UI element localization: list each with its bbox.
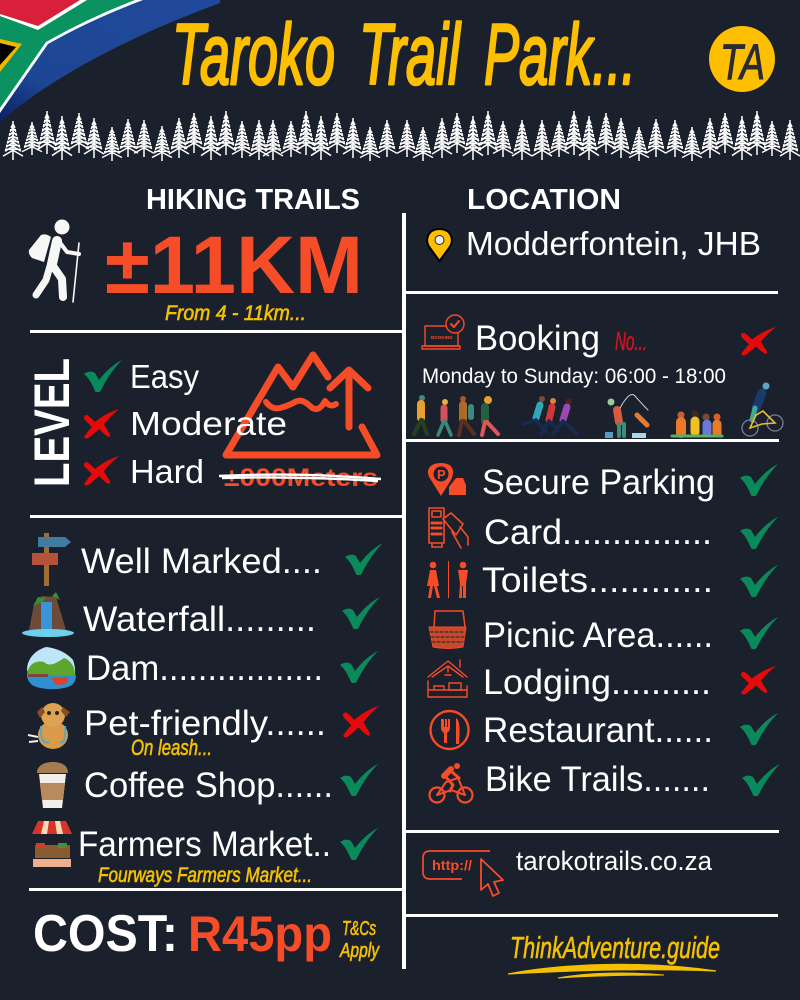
- text: toilets: Toilets............: [482, 561, 713, 600]
- illustration: picnic group: [672, 410, 722, 436]
- opening hours: Monday to Sunday: 06:00 - 18:00: [422, 365, 726, 388]
- check: toilets: [740, 565, 778, 597]
- cost label: COST:: [33, 905, 178, 963]
- check: farmers market: [340, 828, 378, 860]
- text: booking: Booking: [475, 319, 600, 358]
- panel: location: [427, 225, 761, 262]
- panel: amenities: [427, 463, 780, 802]
- cross: booking: [741, 327, 776, 356]
- text: bike trails: Bike Trails.......: [485, 760, 710, 799]
- icon: toilets: [427, 561, 468, 598]
- icon: restaurant: [430, 711, 468, 749]
- moderate row: Moderate: [130, 405, 287, 442]
- elevation struck through: ±000Meters: [224, 464, 378, 492]
- dividers: [29, 213, 779, 969]
- illustration: hikers: [414, 395, 498, 435]
- note: terms: Apply: [339, 940, 380, 962]
- note: fourways farmers market: Fourways Farmers Market...: [98, 864, 312, 887]
- panel: distance: [29, 220, 363, 325]
- icon: lodging: [428, 660, 467, 697]
- text: waterfall: Waterfall.........: [83, 600, 316, 639]
- title: [172, 7, 636, 103]
- check: parking: [740, 464, 778, 496]
- text: card: Card...............: [484, 513, 712, 552]
- text: dam: Dam.................: [86, 649, 323, 688]
- icon: TA logo badge: TA: [720, 34, 765, 90]
- panel: website: [423, 846, 713, 896]
- check: bike trails: [742, 764, 780, 796]
- location name: Modderfontein, JHB: [466, 225, 761, 262]
- icon: http cursor: [423, 851, 503, 896]
- panel: booking and hours: [414, 315, 783, 438]
- check: coffee shop: [340, 764, 378, 796]
- panel: level: [24, 355, 381, 492]
- illustration: cyclist: [742, 382, 783, 436]
- hard row: [84, 453, 204, 490]
- cross: lodging: [741, 666, 776, 695]
- cost value: R45pp: [188, 906, 332, 962]
- text: secure parking: Secure Parking: [482, 463, 715, 502]
- icon: booking laptop: BOOKING: [431, 335, 453, 340]
- icon: parking pin: [428, 463, 466, 496]
- title: Park...: [484, 7, 636, 103]
- tree line: [3, 111, 800, 161]
- icon: parking pin: P: [437, 467, 446, 482]
- icon: signpost: [32, 533, 71, 586]
- panel: cost: [33, 905, 380, 963]
- check: waterfall: [342, 597, 380, 629]
- title: Trail: [359, 7, 462, 103]
- illustration: angler: [605, 394, 648, 438]
- distance figure: ±11KM: [105, 220, 363, 311]
- text: restaurant: Restaurant......: [483, 711, 713, 750]
- check: well marked: [345, 543, 383, 575]
- note: no: No...: [615, 326, 647, 356]
- text: picnic area: Picnic Area......: [483, 616, 713, 655]
- check: picnic: [740, 617, 778, 649]
- cross: pet-friendly: [343, 706, 379, 737]
- easy row: Easy: [130, 358, 199, 395]
- text: well marked: Well Marked....: [81, 542, 322, 581]
- heading: level: LEVEL: [24, 358, 80, 487]
- icon: map pin: [427, 229, 452, 261]
- brand logo: ThinkAdventure.guide: [508, 930, 720, 978]
- icon: waterfall: [22, 592, 74, 637]
- moderate row: [84, 405, 287, 442]
- heading: location: LOCATION: [467, 184, 621, 216]
- note: terms: [339, 918, 380, 962]
- icon: card machine: [429, 508, 468, 548]
- icon: dog on leash: [28, 703, 70, 749]
- easy row: [84, 358, 199, 395]
- illustration: runners: [524, 396, 577, 434]
- icon: booking laptop: [422, 315, 464, 349]
- icon: coffee cup: [37, 762, 68, 808]
- hard row: Hard: [130, 453, 204, 490]
- icon: TA logo badge: [709, 26, 775, 92]
- text: farmers market: Farmers Market..: [78, 825, 331, 864]
- panel: trail features: [22, 533, 383, 887]
- icon: market stall: [32, 821, 72, 867]
- check: dam: [340, 651, 378, 683]
- text: coffee shop: Coffee Shop......: [84, 766, 333, 805]
- title: Taroko: [172, 7, 335, 103]
- icon: bike rider: [430, 763, 472, 802]
- icon: http cursor: http://: [432, 857, 472, 873]
- icon: picnic basket: [429, 611, 466, 648]
- website address: tarokotrails.co.za: [516, 846, 713, 876]
- heading: hiking trails: HIKING TRAILS: [146, 184, 360, 216]
- icon: hiker: [29, 220, 79, 302]
- note: terms: T&Cs: [342, 918, 376, 940]
- text: pet-friendly: Pet-friendly......: [84, 704, 326, 743]
- icon: South African flag corner: [0, 0, 220, 122]
- text: lodging: Lodging..........: [483, 663, 711, 702]
- check: card: [740, 517, 778, 549]
- icon: mountain elevation: [226, 355, 377, 455]
- note: on leash: On leash...: [131, 735, 212, 760]
- distance range note: From 4 - 11km...: [165, 302, 306, 325]
- check: restaurant: [740, 713, 778, 745]
- icon: dam: [27, 647, 76, 689]
